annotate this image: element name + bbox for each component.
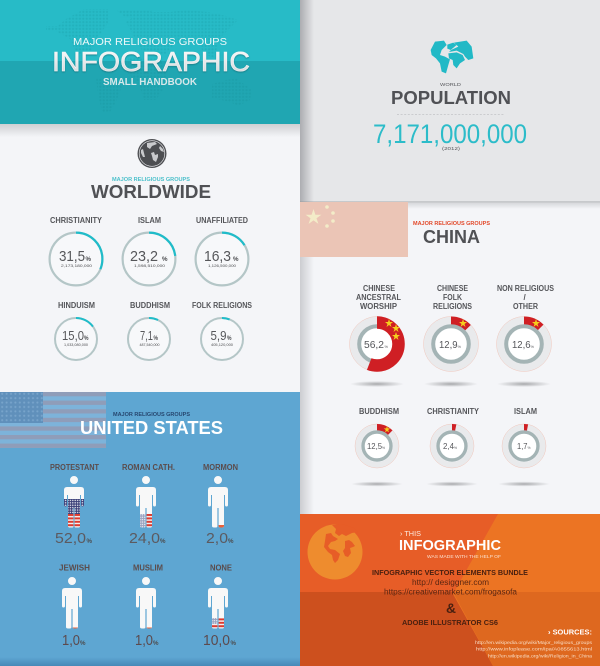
stat: unaffiliated	[196, 216, 248, 285]
panel: united states	[0, 392, 300, 666]
stat: folk religions: 5,9	[210, 328, 226, 343]
stat: jewish: JEWISH	[59, 564, 90, 572]
stat: christianity: CHRISTIANITY	[427, 407, 480, 416]
header lower band	[0, 61, 300, 124]
stat: christianity: %	[454, 446, 457, 450]
stat: buddhism: 487,540,000	[140, 342, 160, 347]
panel: world population	[300, 0, 600, 203]
bottom shade	[0, 657, 300, 666]
stat: buddhism: %	[382, 446, 385, 450]
stat: islam: 1,598,510,000	[134, 263, 166, 268]
stat: chinese ancestral worship: WORSHIP	[360, 302, 398, 311]
stat: christianity: 2,4	[443, 442, 455, 451]
stat: chinese ancestral worship: CHINESE	[363, 284, 396, 293]
stat: islam: %	[162, 257, 168, 263]
stat: chinese folk religions: %	[458, 344, 461, 349]
stat: non religious / other: /	[524, 293, 526, 302]
left shadow	[300, 203, 314, 514]
stat: none: NONE	[210, 564, 233, 572]
stat: protestant: 52,0	[55, 531, 86, 547]
panel: credits	[300, 514, 600, 666]
stat: muslim	[133, 564, 163, 649]
source link 2: http://www.infoplease.com/ipa/A0855613.html	[476, 646, 592, 652]
stat: christianity	[426, 407, 480, 486]
stat: unaffiliated: 16,3	[204, 248, 231, 265]
stat: chinese ancestral worship	[350, 284, 404, 387]
heading: sources: › SOURCES:	[548, 630, 592, 637]
dotted world map	[46, 9, 252, 112]
icon: globe	[138, 139, 166, 168]
stat: none: 10,0	[203, 633, 230, 649]
text: adobe illustrator: ADOBE ILLUSTRATOR CS6	[402, 620, 498, 627]
number: population total: 7,171,000,000	[373, 119, 527, 149]
stat: chinese ancestral worship: ANCESTRAL	[356, 293, 401, 302]
stat: chinese folk religions	[424, 284, 478, 387]
title: infographic: INFOGRAPHIC	[52, 46, 250, 77]
stat: roman catholic: %	[160, 539, 166, 545]
stat: christianity: CHRISTIANITY	[50, 216, 103, 225]
stat: chinese folk religions: RELIGIONS	[433, 302, 473, 311]
stat: islam: 23,2	[130, 248, 158, 265]
subtitle: small handbook: SMALL HANDBOOK	[103, 77, 198, 88]
left shadow	[300, 0, 314, 203]
subtitle: major religious groups: MAJOR RELIGIOUS GROUPS	[73, 36, 227, 48]
heading: china: CHINA	[423, 226, 480, 247]
stat: hinduism	[55, 301, 97, 360]
eyebrow: major religious groups: MAJOR RELIGIOUS GROUPS	[413, 221, 491, 227]
stat: non religious / other: 12,6	[512, 340, 531, 351]
stat: roman catholic	[122, 463, 175, 547]
stat: roman catholic: 24,0	[129, 531, 160, 547]
dashed divider	[397, 114, 505, 116]
stat: mormon: MORMON	[203, 463, 238, 472]
diagonal lower shade	[453, 592, 600, 666]
stat: christianity: %	[86, 257, 92, 263]
stat: unaffiliated: %	[233, 257, 239, 263]
header upper band	[0, 0, 300, 61]
stat: buddhism: BUDDHISM	[130, 301, 170, 310]
stat: folk religions	[192, 301, 253, 360]
source link 1: http://en.wikipedia.org/wiki/Major_religious_groups	[475, 640, 593, 645]
stat: protestant: PROTESTANT	[50, 463, 99, 472]
top shadow	[300, 201, 600, 209]
stat: jewish: 1,0	[62, 633, 80, 649]
stat: folk religions: 405,120,000	[211, 342, 234, 347]
stat: buddhism: 7,1	[140, 328, 153, 343]
stat: muslim: %	[153, 641, 159, 647]
link: creative market: https://creativemarket.com/frogasofa	[384, 588, 518, 597]
stat: chinese folk religions: 12,9	[439, 340, 458, 351]
us flag	[0, 392, 106, 448]
stat: christianity: 31,5	[59, 248, 85, 265]
text: made with the help of: WAS MADE WITH THE HELP OF	[427, 554, 501, 560]
china flag	[300, 202, 408, 257]
stat: buddhism: %	[154, 336, 159, 342]
stat: islam: 1,7	[517, 442, 528, 451]
stat: none	[203, 564, 237, 649]
eyebrow: major religious groups: MAJOR RELIGIOUS GROUPS	[113, 412, 191, 418]
stat: mormon: %	[228, 539, 234, 545]
stat: hinduism: 15,0	[62, 328, 84, 343]
stat: christianity: 2,173,180,000	[61, 263, 93, 268]
link: desiggner: http:// desiggner.com	[412, 578, 489, 587]
stat: christianity	[50, 216, 103, 285]
stat: chinese folk religions: FOLK	[443, 293, 462, 302]
eyebrow: major religious groups: MAJOR RELIGIOUS GROUPS	[112, 177, 191, 183]
label: world: WORLD	[440, 82, 462, 87]
heading: infographic: INFOGRAPHIC	[399, 537, 501, 554]
icon: world map heart	[431, 41, 473, 73]
icon: orange globe	[308, 524, 362, 580]
panel: china	[300, 201, 600, 514]
stat: buddhism: 12,5	[367, 442, 383, 451]
stat: islam	[498, 407, 550, 486]
stat: islam: %	[528, 446, 530, 450]
population background	[300, 0, 600, 203]
stat: folk religions: FOLK RELIGIONS	[192, 301, 253, 310]
panel: header	[0, 0, 300, 124]
stat: chinese ancestral worship: %	[384, 344, 388, 349]
stat: unaffiliated: 1,126,500,000	[208, 263, 237, 268]
stat: non religious / other	[496, 284, 555, 387]
stat: none: %	[230, 641, 237, 647]
heading: worldwide: WORLDWIDE	[91, 181, 211, 202]
stat: non religious / other: %	[530, 344, 534, 349]
stat: non religious / other: OTHER	[513, 302, 538, 311]
stat: protestant: %	[86, 539, 93, 545]
us background	[0, 392, 300, 666]
credits lower band	[300, 592, 600, 666]
stat: hinduism: %	[84, 336, 89, 342]
stat: unaffiliated: UNAFFILIATED	[196, 216, 248, 225]
stat: hinduism: 1,033,080,000	[64, 342, 89, 347]
heading: united states: UNITED STATES	[80, 417, 223, 438]
stat: muslim: MUSLIM	[133, 564, 163, 572]
source link 3: http://en.wikipedia.org/wiki/Religion_in_China	[488, 654, 593, 658]
stat: hinduism: HINDUISM	[58, 301, 95, 310]
text: this: › THIS	[400, 529, 421, 538]
stat: islam: ISLAM	[514, 407, 537, 416]
stat: islam	[123, 216, 175, 285]
stat: mormon: 2,0	[206, 531, 228, 547]
stat: buddhism: BUDDHISM	[359, 407, 399, 416]
credits upper band	[300, 514, 600, 592]
panel: worldwide	[0, 124, 300, 392]
label: year: (2012)	[442, 146, 461, 151]
stat: islam: ISLAM	[138, 216, 161, 225]
top shadow	[0, 124, 300, 137]
stat: protestant	[50, 463, 99, 547]
ampersand: &	[446, 600, 456, 616]
stat: jewish	[59, 564, 90, 649]
diagonal lighter shape	[453, 514, 600, 666]
heading: population: POPULATION	[391, 87, 511, 108]
stat: buddhism	[351, 407, 403, 486]
stat: roman catholic: ROMAN CATH.	[122, 463, 175, 472]
china background	[300, 203, 600, 514]
stat: muslim: 1,0	[135, 633, 153, 649]
stat: chinese ancestral worship: 56,2	[364, 340, 384, 351]
worldwide background	[0, 124, 300, 392]
stat: chinese folk religions: CHINESE	[437, 284, 469, 293]
stat: buddhism	[128, 301, 170, 360]
stat: mormon	[203, 463, 238, 547]
stat: jewish: %	[80, 641, 86, 647]
stat: folk religions: %	[227, 336, 232, 342]
text: vector elements bundle: INFOGRAPHIC VECTOR ELEMENTS BUNDLE	[372, 570, 528, 577]
stat: non religious / other: NON RELIGIOUS	[497, 284, 555, 293]
